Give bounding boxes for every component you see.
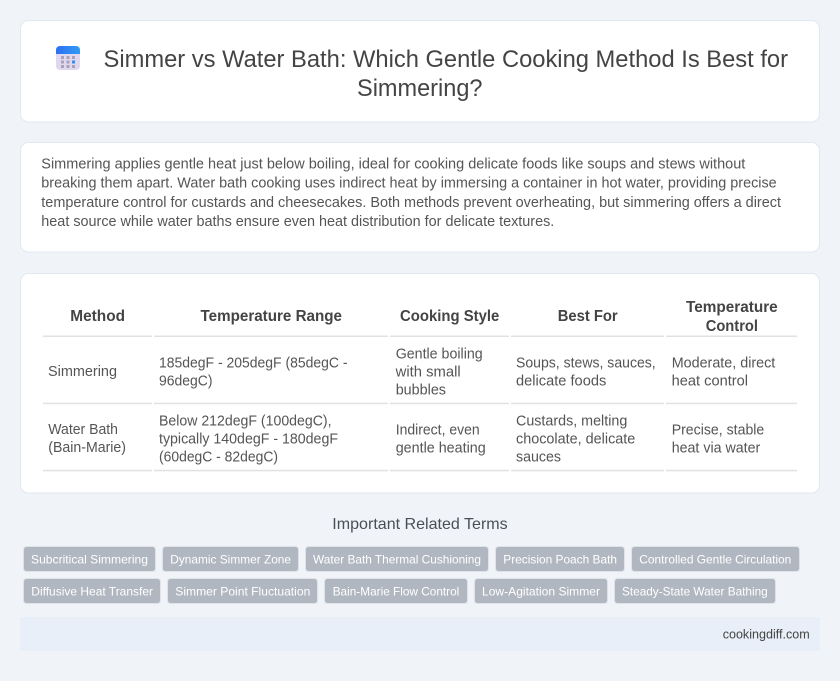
tag list: related terms: Water Bath Thermal Cushioning (313, 552, 481, 566)
table row: water bath: Indirect, even (396, 422, 480, 438)
tag list: related terms: Bain-Marie Flow Control (333, 584, 459, 598)
panel: introduction (20, 142, 820, 252)
tag list: related terms: Diffusive Heat Transfer (31, 584, 153, 598)
table row: water bath: Custards, melting (516, 413, 627, 429)
table row: simmering: heat control (672, 373, 748, 389)
table row: water bath: typically 140degF - 180degF (159, 431, 338, 447)
panel: comparison table (20, 274, 820, 493)
tag list: related terms: Subcritical Simmering (31, 552, 148, 566)
tag list: related terms: Simmer Point Fluctuation (175, 584, 310, 598)
table row: simmering: bubbles (396, 382, 446, 398)
tag list: related terms: Controlled Gentle Circulation (639, 552, 791, 566)
text block: intro paragraph: breaking them apart. Water bath cooking uses indirect heat by immersing a container in hot water, providing precise (41, 175, 777, 191)
table row: water bath: Water Bath (48, 422, 118, 438)
panel: title header (20, 20, 820, 122)
table header row: Control (706, 318, 758, 335)
tag list: related terms: Low-Agitation Simmer (482, 584, 600, 598)
table row: water bath: chocolate, delicate (516, 431, 635, 447)
tag list: related terms: Precision Poach Bath (503, 552, 617, 566)
table header row: Method (70, 308, 125, 325)
title: Simmer vs Water Bath: Which Gentle Cooking Method Is Best for (104, 46, 788, 73)
tag list: related terms: Dynamic Simmer Zone (170, 552, 291, 566)
table row: water bath: (Bain-Marie) (48, 440, 126, 456)
table row: simmering: with small (395, 364, 461, 380)
tag list: related terms (24, 546, 800, 604)
text block: intro paragraph: Simmering applies gentle heat just below boiling, ideal for cooking delicate foods like soups and stews without (41, 156, 745, 172)
table row: water bath: gentle heating (396, 440, 486, 456)
table row: water bath: (60degC - 82degC) (159, 449, 278, 465)
table row: simmering: 185degF - 205degF (85degC - (159, 355, 348, 371)
table header row: Cooking Style (400, 308, 499, 325)
table row: simmering: Simmering (48, 364, 117, 380)
text block: intro paragraph: heat source while water baths ensure even heat distribution for delicate textures. (41, 214, 554, 230)
table row: water bath: Precise, stable (672, 422, 764, 438)
icon: calendar (56, 46, 80, 70)
table header row: Best For (558, 308, 618, 325)
table row: simmering: Soups, stews, sauces, (516, 355, 656, 371)
title: Simmering? (357, 75, 482, 102)
text block: intro paragraph: temperature control for custards and cheesecakes. Both methods prevent overheating, but simmering offers a direct (41, 195, 781, 211)
table row: water bath (48, 413, 764, 465)
tag list: related terms: Steady-State Water Bathing (622, 584, 768, 598)
table row: simmering: Gentle boiling (396, 346, 483, 362)
table row: water bath: sauces (516, 449, 561, 465)
footer: cookingdiff.com (723, 626, 810, 641)
table row: simmering: 96degC) (159, 373, 212, 389)
footer (20, 617, 820, 651)
table header row: Temperature (686, 299, 778, 316)
table header row: Temperature Range (200, 308, 342, 325)
table row: simmering: Moderate, direct (672, 355, 775, 371)
text block: intro paragraph (41, 156, 781, 230)
title (104, 46, 788, 102)
table row: water bath: heat via water (672, 440, 761, 456)
table row: simmering: delicate foods (516, 373, 606, 389)
table row: water bath: Below 212degF (100degC), (159, 413, 332, 429)
heading: important related terms: Important Related Terms (332, 516, 508, 533)
table header row (70, 299, 778, 335)
table row: simmering (48, 346, 775, 398)
